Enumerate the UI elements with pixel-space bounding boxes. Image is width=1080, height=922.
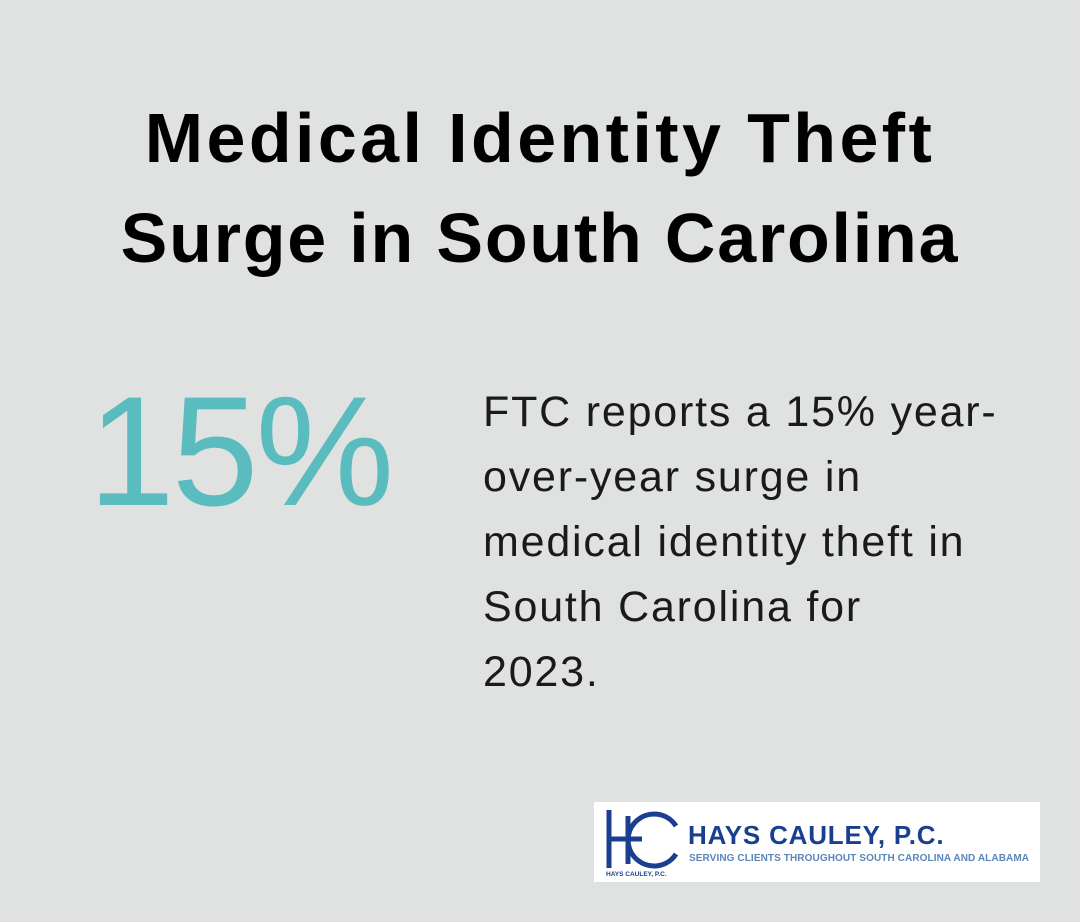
- description text: over-year surge in: [483, 453, 862, 501]
- description text: medical identity theft in: [483, 518, 965, 566]
- logo small caption: HAYS CAULEY, P.C.: [606, 871, 667, 878]
- description text: FTC reports a 15% year-: [483, 388, 998, 436]
- description text: South Carolina for: [483, 583, 862, 631]
- logo: [594, 802, 1040, 882]
- description text: [483, 388, 998, 696]
- icon: HC monogram: [606, 810, 678, 868]
- logo tagline: SERVING CLIENTS THROUGHOUT SOUTH CAROLINA AND ALABAMA: [689, 853, 1029, 864]
- title: [121, 99, 959, 277]
- title: Surge in South Carolina: [121, 199, 959, 277]
- big stat: 15%: 15%: [88, 365, 391, 539]
- title: Medical Identity Theft: [145, 99, 935, 177]
- description text: 2023.: [483, 648, 600, 696]
- logo name: HAYS CAULEY, P.C.: [688, 820, 944, 850]
